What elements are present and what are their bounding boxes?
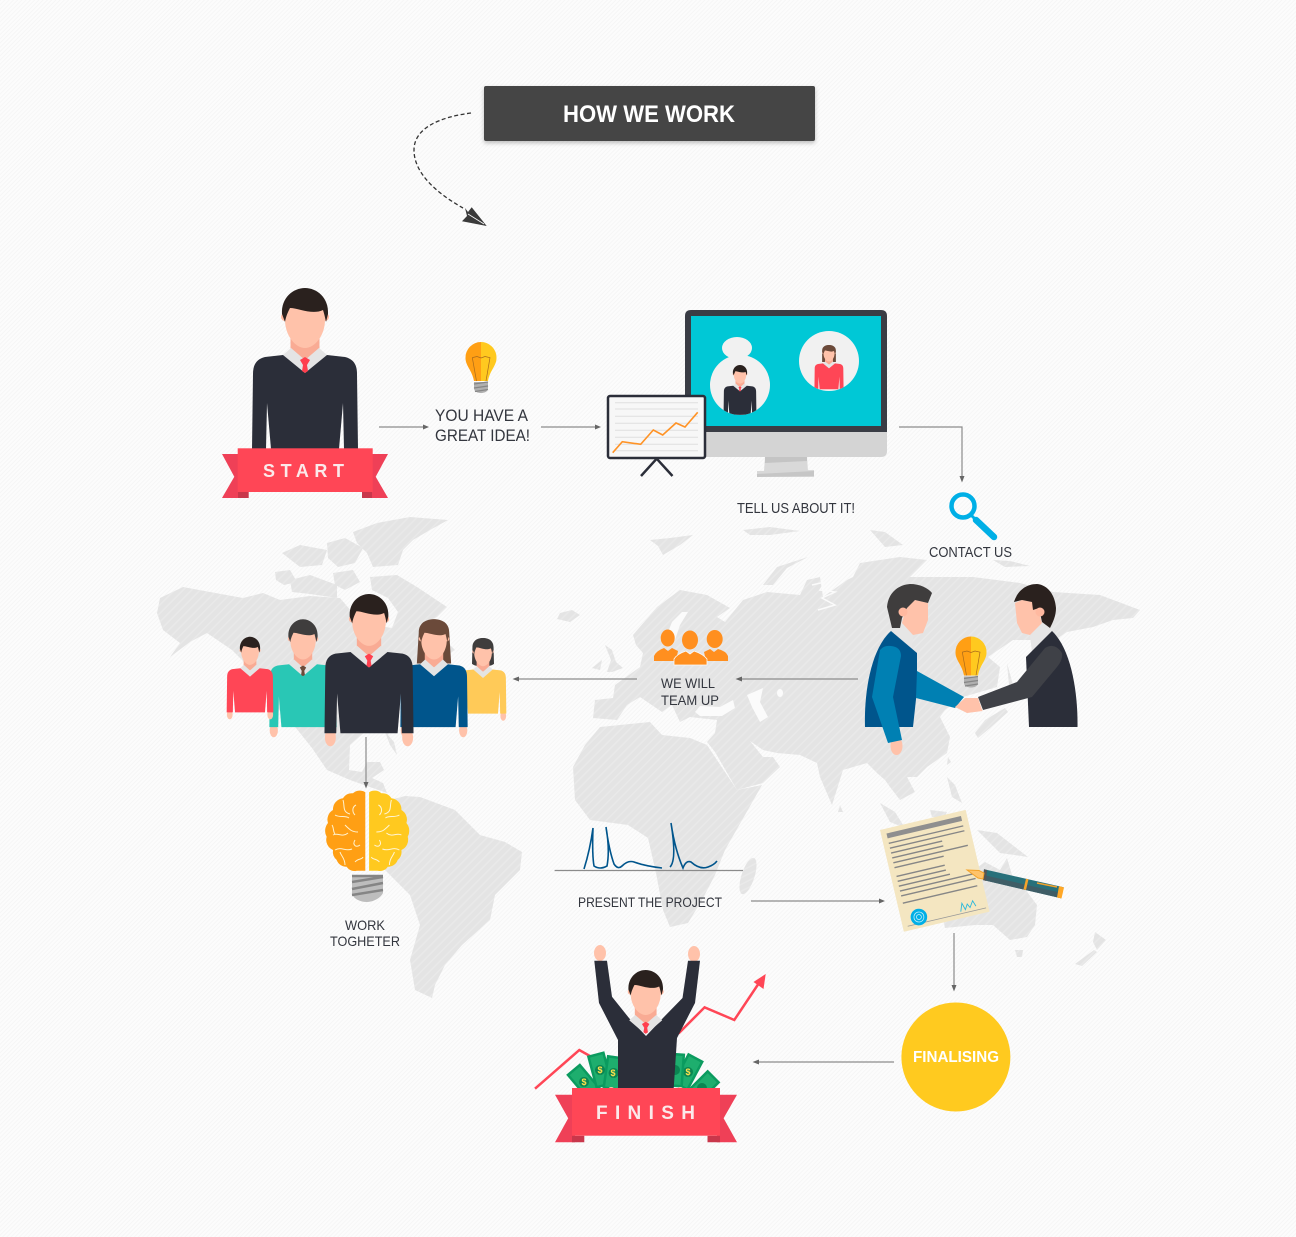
caller avatar: man: [710, 337, 770, 420]
arrow: present to contract: [751, 898, 885, 904]
dashed arrow with paper plane: [414, 113, 487, 226]
text: you have a great idea: GREAT IDEA!: [435, 427, 530, 445]
icon: idea bulb: [465, 342, 497, 393]
text: work togheter: [330, 917, 400, 949]
africa: [573, 722, 762, 927]
arrow: contract to finalising: [952, 933, 956, 992]
northern islands: [557, 527, 1030, 622]
finalising circle: FINALISING: [913, 1049, 999, 1066]
icon: magnifier: [952, 494, 994, 537]
madagascar: [736, 856, 760, 896]
brain right half: [369, 791, 409, 871]
cheering man: [594, 945, 700, 1102]
clasped hands: [955, 698, 982, 713]
rising red chart arrow: [535, 974, 766, 1089]
left businessman: [865, 584, 964, 755]
title banner: [484, 86, 815, 141]
icon: brain light bulb: [325, 791, 409, 902]
monitor body: [685, 432, 887, 457]
finish ribbon: FINISH: [596, 1103, 695, 1124]
text: present the project: PRESENT THE PROJECT: [578, 894, 722, 910]
arctic gulfs: [812, 582, 835, 610]
arrow: team to brain: [364, 737, 368, 788]
text: we will team up: [661, 675, 719, 708]
text: you have a great idea: YOU HAVE A: [435, 407, 528, 425]
text: you have a great idea: [435, 407, 530, 445]
text: work togheter: WORK: [345, 917, 386, 933]
australia: [940, 858, 1037, 940]
person: central man in suit: [324, 594, 414, 746]
arrow: finalising to finish: [752, 1060, 894, 1064]
arrow: monitor to contact: [899, 427, 964, 482]
eurasia: [593, 557, 1140, 805]
start figure: [222, 288, 388, 498]
person: teal man: [269, 619, 337, 737]
world map: [157, 517, 1140, 998]
monitor stand: [757, 457, 814, 477]
money bills: $: [610, 1068, 616, 1078]
inland seas and gulfs: [666, 612, 783, 722]
text: contact us: CONTACT US: [929, 545, 1012, 561]
person: blue woman: [400, 619, 468, 737]
finish ribbon: [555, 1088, 737, 1142]
arrow: team icon to group: [512, 676, 637, 682]
icon: orange team: [654, 630, 728, 665]
money bills: $: [685, 1067, 691, 1077]
money bills: $: [581, 1077, 587, 1087]
tasmania and new zealand: [1015, 932, 1106, 966]
arrow: handshake to team icon: [736, 676, 858, 682]
money bills: $: [597, 1065, 603, 1075]
text: tell us about it: TELL US ABOUT IT!: [737, 501, 855, 517]
north america: [157, 575, 455, 793]
person: red man: [227, 637, 273, 719]
arrow: start to idea: [379, 424, 429, 430]
person: yellow woman: [460, 638, 506, 721]
man in suit: [252, 288, 358, 464]
finish figure: [535, 945, 766, 1142]
team of five people: [227, 594, 506, 746]
greenland: [353, 517, 448, 567]
right businessman: [978, 584, 1078, 727]
text: we will team up: WE WILL: [661, 675, 715, 691]
text: work togheter: TOGHETER: [330, 933, 400, 949]
brain left half: [325, 791, 365, 871]
handshake scene: [865, 584, 1078, 755]
new guinea: [977, 830, 1028, 857]
text: we will team up: TEAM UP: [661, 692, 719, 708]
start ribbon: [222, 448, 388, 498]
finalising circle: [901, 1002, 1010, 1112]
japan and korea: [975, 663, 1013, 738]
arctic archipelago: [275, 538, 363, 598]
title banner: HOW WE WORK: [563, 101, 736, 128]
presentation board with chart: [608, 396, 705, 476]
south america: [378, 796, 522, 998]
fountain pen: [967, 869, 1064, 898]
start ribbon: START: [263, 461, 344, 481]
icon: bulb between hands: [955, 636, 987, 688]
contract document with pen: [880, 810, 1064, 932]
signature on a line: [555, 823, 743, 870]
document sheet: [880, 810, 990, 932]
caller avatar: woman: [799, 331, 859, 393]
money bills: [566, 1051, 720, 1106]
monitor with video call: [685, 310, 887, 477]
south east asia: [838, 757, 962, 828]
bulb screw base: [352, 875, 383, 902]
arrow: idea to presentation: [541, 424, 601, 430]
british isles: [592, 645, 623, 672]
